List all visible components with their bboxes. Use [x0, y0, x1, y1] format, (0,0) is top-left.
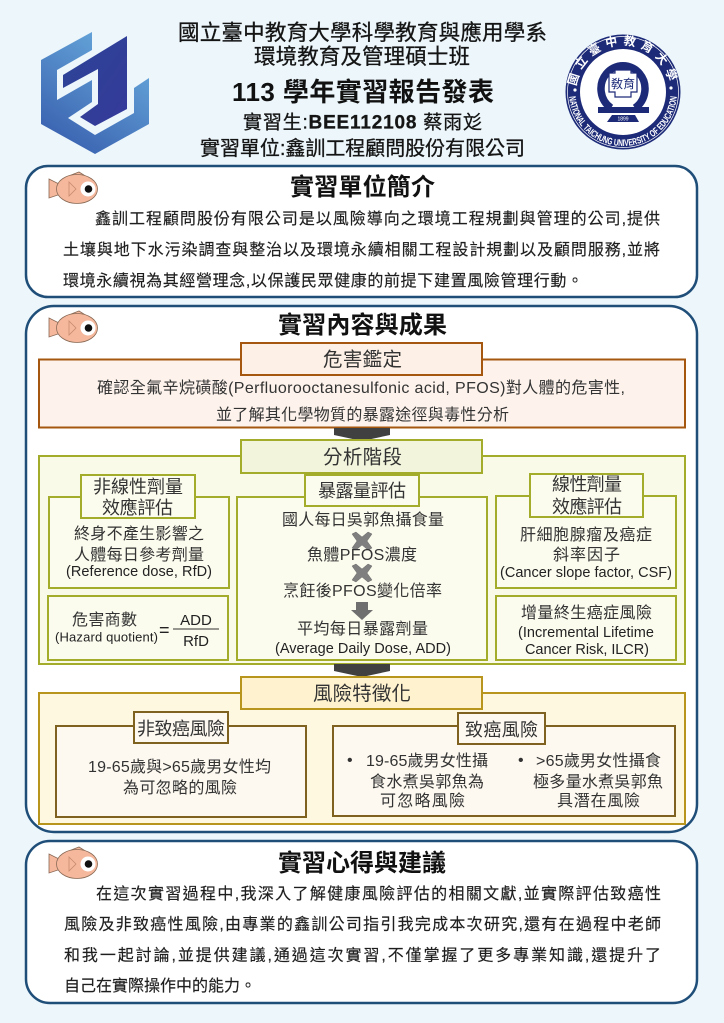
panel: hazard quotient formula: RfD: [183, 633, 209, 650]
heading: 實習心得與建議: [278, 850, 446, 877]
panel: non-carcinogenic risk: 為可忽略的風險: [123, 779, 237, 797]
text block: 和我一起討論,並提供建議,通過這次實習,不僅掌握了更多專業知識,還提升了: [64, 946, 661, 964]
panel: linear dose response: (Cancer slope factor, CSF): [500, 565, 672, 581]
arrow: [334, 664, 390, 677]
panel: risk characterization: 風險特徵化: [313, 683, 411, 705]
panel: hazard identification: 確認全氟辛烷磺酸(Perfluorooctanesulfonic acid, PFOS)對人體的危害性,: [97, 379, 625, 397]
panel: linear dose response: 效應評估: [552, 496, 622, 517]
panel: linear dose response: 線性劑量: [552, 474, 622, 494]
panel: carcinogenic risk: 食水煮吳郭魚為: [370, 773, 484, 791]
panel: reflections and suggestions: [26, 841, 697, 1003]
icon: university seal: NATIONAL TAICHUNG UNIVERSITY OF EDUCATION: [569, 96, 677, 146]
panel: exposure assessment: (Average Daily Dose, ADD): [275, 641, 451, 657]
panel: hazard quotient formula: [48, 596, 228, 660]
panel: carcinogenic risk: 可忽略風險: [380, 792, 465, 810]
heading: 實習內容與成果: [278, 312, 447, 339]
panel: incremental lifetime cancer risk: [496, 596, 676, 660]
panel: non-linear dose response: (Reference dose, RfD): [66, 564, 212, 580]
panel: non-linear dose response: [49, 475, 229, 588]
panel: incremental lifetime cancer risk: Cancer Risk, ILCR): [525, 642, 649, 658]
icon: fish: [49, 311, 98, 342]
panel: hazard identification: 危害鑑定: [323, 349, 402, 371]
panel: exposure assessment: 暴露量評估: [318, 481, 406, 501]
icon: multiply: [352, 532, 372, 550]
icon: fish: [49, 847, 98, 878]
icon: university seal: [566, 34, 680, 150]
text block: 環境永續視為其經營理念,以保護民眾健康的前提下建置風險管理行動。: [63, 271, 583, 290]
panel: analysis stage: 分析階段: [323, 446, 402, 468]
panel: non-linear dose response: 終身不產生影響之: [74, 525, 204, 543]
panel: carcinogenic risk: 具潛在風險: [557, 792, 640, 810]
panel: carcinogenic risk: 極多量水煮吳郭魚: [533, 773, 663, 791]
panel: carcinogenic risk: •: [347, 752, 353, 769]
arrow: [351, 602, 373, 620]
panel: exposure assessment: 國人每日吳郭魚攝食量: [282, 510, 444, 529]
panel: hazard identification: [39, 343, 685, 428]
title: 實習單位:鑫訓工程顧問股份有限公司: [200, 137, 525, 160]
text block: 在這次實習過程中,我深入了解健康風險評估的相關文獻,並實際評估致癌性: [96, 884, 661, 903]
text block: 鑫訓工程顧問股份有限公司是以風險導向之環境工程規劃與管理的公司,提供: [95, 209, 660, 228]
panel: carcinogenic risk: [333, 713, 675, 816]
icon: university seal: 敎育: [611, 76, 635, 91]
panel: company introduction: [26, 166, 697, 297]
icon: university seal: 1899: [617, 116, 629, 122]
panel: exposure assessment: 平均每日暴露劑量: [297, 620, 428, 638]
title: 國立臺中教育大學科學教育與應用學系: [178, 20, 547, 45]
panel: linear dose response: [496, 474, 676, 588]
panel: incremental lifetime cancer risk: (Incremental Lifetime: [518, 625, 654, 641]
panel: hazard quotient formula: 危害商數: [72, 611, 137, 629]
panel: non-linear dose response: 效應評估: [102, 497, 173, 518]
panel: exposure assessment: 烹飪後PFOS變化倍率: [283, 581, 442, 600]
panel: linear dose response: 肝細胞腺瘤及癌症: [520, 526, 652, 544]
text block: 風險及非致癌性風險,由專業的鑫訓公司指引我完成本次研究,還有在過程中老師: [64, 914, 661, 934]
panel: hazard quotient formula: (Hazard quotient): [55, 630, 158, 644]
panel: internship content and results: [26, 306, 697, 832]
panel: hazard quotient formula: ADD: [180, 612, 212, 629]
text block: 土壤與地下水污染調查與整治以及環境永續相關工程設計規劃以及顧問服務,並將: [63, 240, 660, 259]
panel: non-linear dose response: 非線性劑量: [93, 477, 183, 497]
panel: carcinogenic risk: >65歲男女性攝食: [536, 751, 661, 770]
title: 環境教育及管理碩士班: [254, 45, 470, 69]
text block: [63, 209, 660, 290]
icon: department logo: [41, 32, 149, 154]
panel: carcinogenic risk: 19-65歲男女性攝: [366, 751, 488, 770]
icon: fish: [49, 172, 98, 204]
panel: exposure assessment: [237, 475, 487, 660]
panel: linear dose response: 斜率因子: [553, 546, 620, 564]
panel: carcinogenic risk: 致癌風險: [465, 720, 538, 740]
panel: non-carcinogenic risk: 非致癌風險: [137, 719, 225, 739]
text block: [64, 884, 661, 995]
arrow: [334, 428, 390, 441]
panel: non-carcinogenic risk: 19-65歲與>65歲男女性均: [88, 757, 271, 776]
title: 113 學年實習報告發表: [232, 77, 494, 107]
panel: incremental lifetime cancer risk: 增量終生癌症風險: [521, 604, 652, 622]
panel: carcinogenic risk: •: [518, 752, 524, 769]
heading: 實習單位簡介: [290, 173, 435, 201]
panel: risk characterization: [39, 677, 685, 824]
panel: non-linear dose response: 人體每日參考劑量: [74, 546, 204, 564]
panel: hazard identification: 並了解其化學物質的暴露途徑與毒性分析: [216, 406, 509, 424]
panel: non-carcinogenic risk: [56, 712, 306, 817]
title: [178, 20, 547, 160]
panel: analysis stage: [39, 440, 685, 664]
panel: hazard quotient formula: =: [159, 620, 170, 640]
text block: 自己在實際操作中的能力。: [64, 976, 256, 995]
icon: multiply: [352, 564, 372, 582]
title: 實習生:BEE112108 蔡雨彣: [243, 112, 482, 134]
icon: university seal: 國立臺中教育大學: [566, 34, 678, 86]
panel: exposure assessment: 魚體PFOS濃度: [307, 546, 417, 564]
